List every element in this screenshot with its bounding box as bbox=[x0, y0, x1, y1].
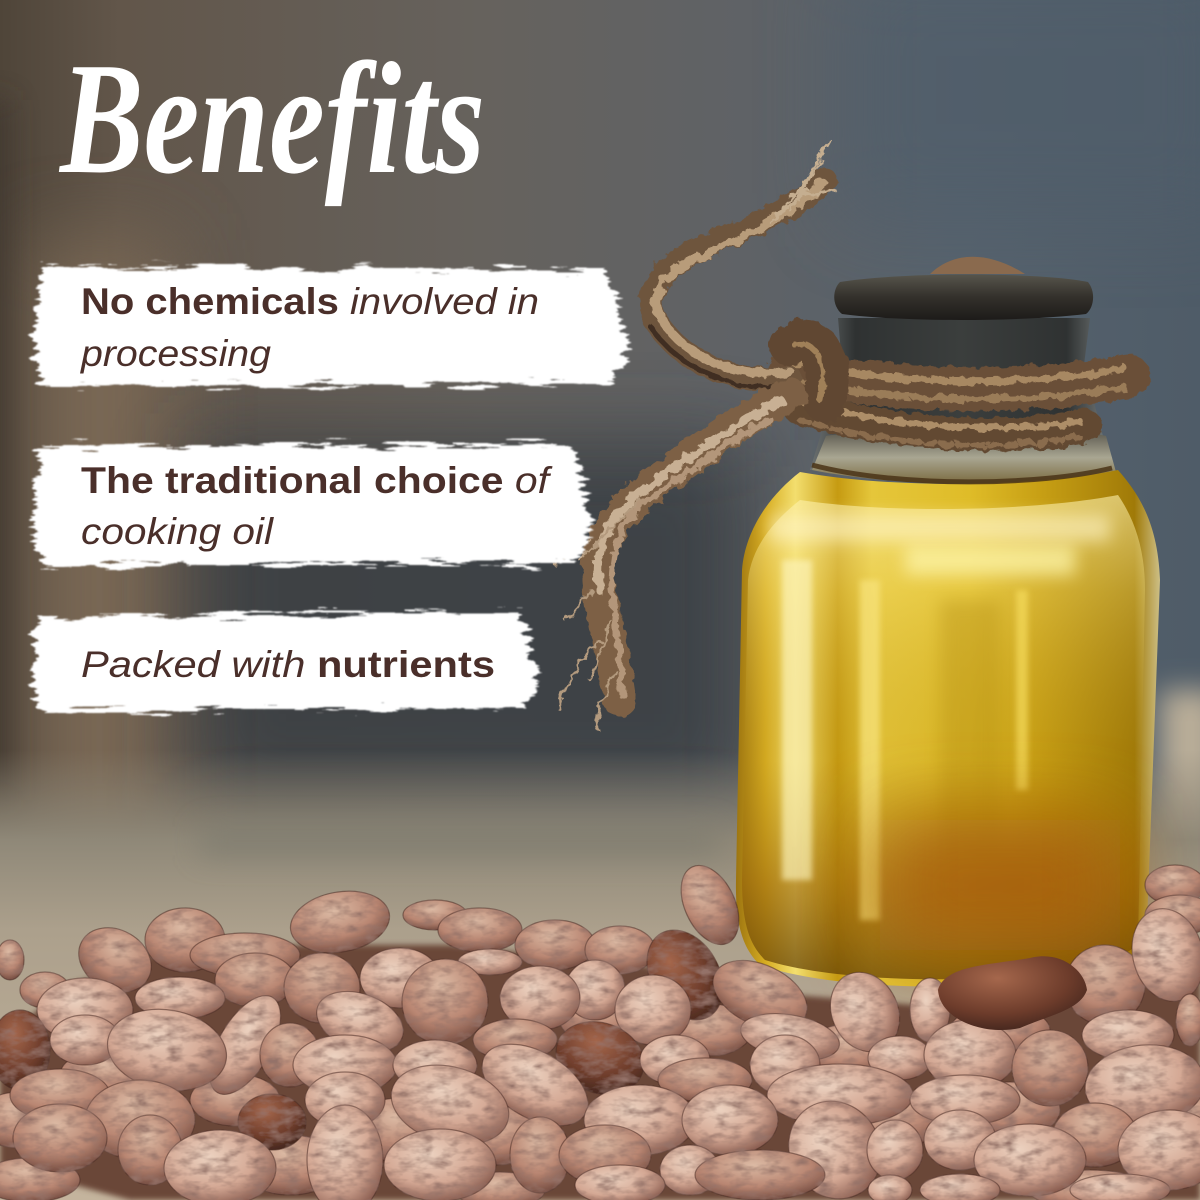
oil shading bbox=[742, 495, 1145, 979]
filler nuts bbox=[0, 1092, 65, 1148]
glass neck bbox=[810, 318, 1112, 470]
benefit 1 bbox=[34, 266, 628, 386]
upper frayed end bbox=[651, 180, 825, 379]
jar shoulder bbox=[812, 432, 1116, 484]
pile shadow base bbox=[0, 945, 1200, 1200]
benefit 2 text line 2: cooking oil bbox=[81, 511, 275, 552]
benefit 2 text: The traditional choice of bbox=[81, 460, 553, 501]
knot behind lid bbox=[930, 257, 1025, 274]
lid bbox=[834, 274, 1093, 320]
brush stroke 2 bbox=[34, 444, 592, 566]
benefit 1 text: No chemicals involved in bbox=[81, 281, 539, 322]
rope bbox=[555, 140, 1128, 730]
oil line bbox=[812, 465, 1112, 482]
oil jar bbox=[736, 257, 1160, 986]
oil highlights bbox=[770, 515, 1120, 950]
lower frayed end bbox=[598, 395, 790, 700]
benefit 3 text: Packed with nutrients bbox=[81, 644, 495, 685]
benefit 3 bbox=[32, 612, 540, 712]
oil liquid bbox=[736, 470, 1160, 986]
benefit 1 text line 2: processing bbox=[80, 333, 271, 374]
brush stroke 1 bbox=[34, 266, 628, 386]
brush stroke 3 bbox=[32, 612, 540, 712]
benefit 2 bbox=[34, 444, 592, 566]
knot bbox=[790, 341, 828, 402]
dark glossy peanut bbox=[938, 956, 1087, 1030]
peanut pile bbox=[0, 856, 1200, 1200]
rope around neck bbox=[790, 370, 1128, 389]
title: Benefits bbox=[58, 29, 485, 207]
